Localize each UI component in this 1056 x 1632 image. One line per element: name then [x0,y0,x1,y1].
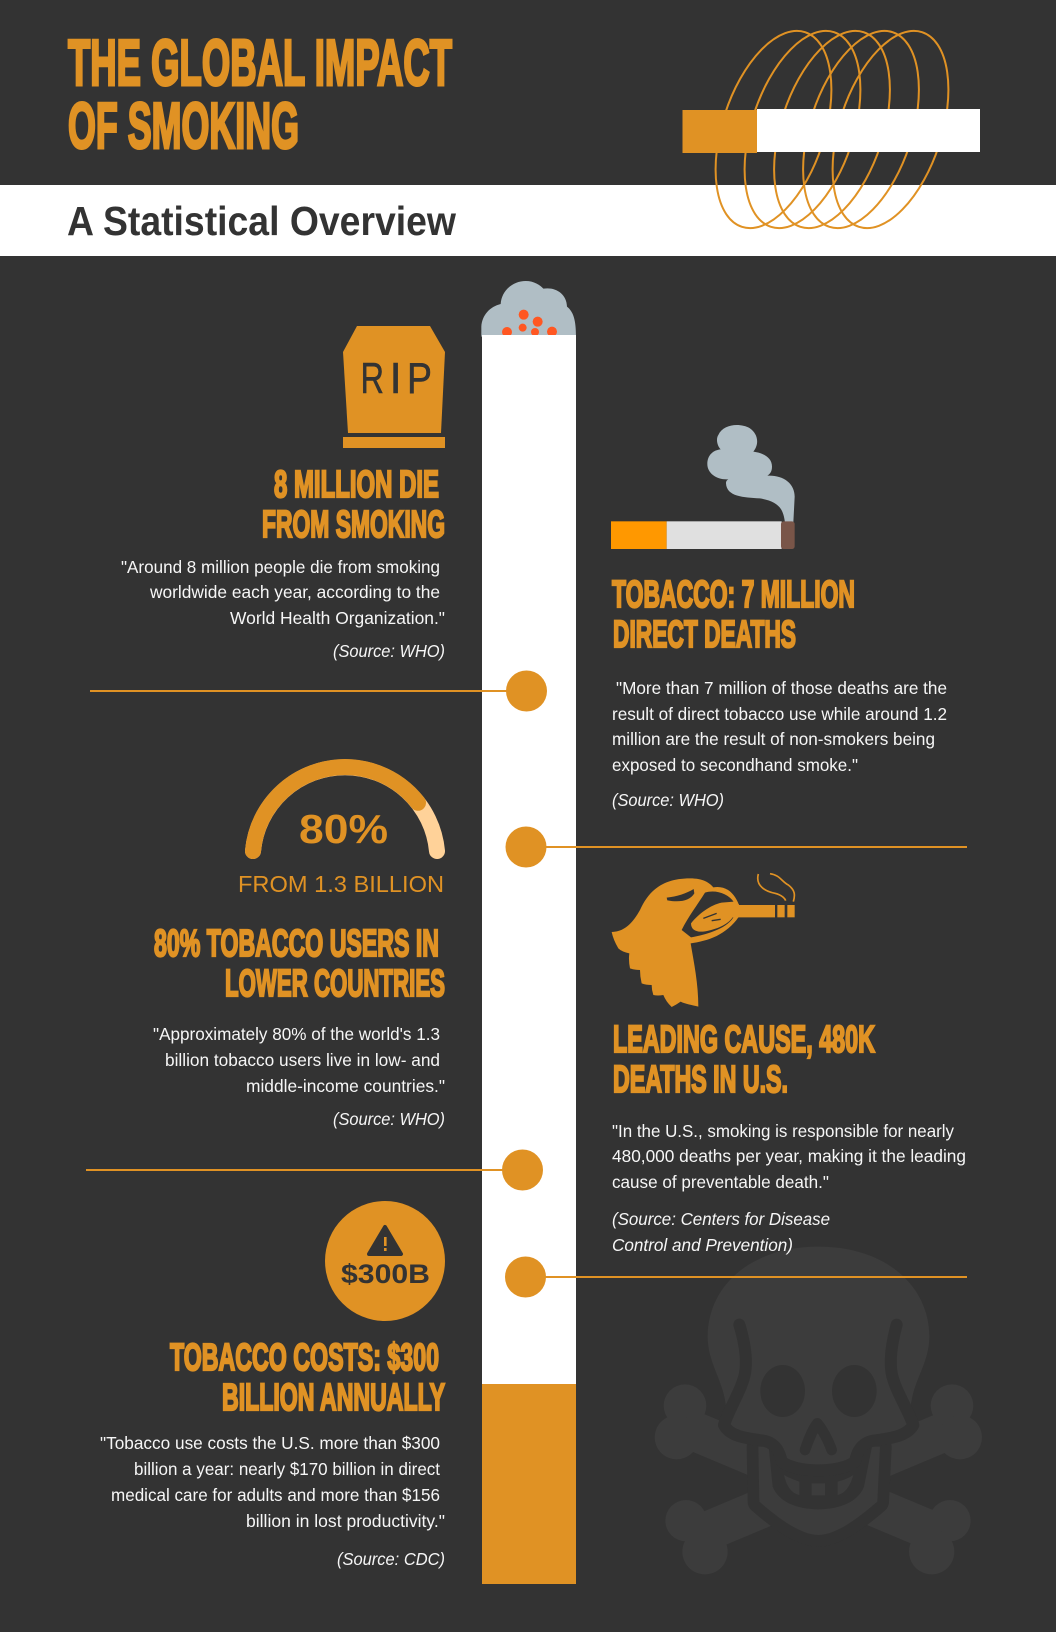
body text: cause of preventable death." [612,1172,829,1192]
heading: LEADING CAUSE, 480K [613,1019,875,1061]
source: Control and Prevention) [612,1235,793,1255]
icon: $300B warning badge [325,1201,445,1321]
body text: billion tobacco users live in low- and [165,1050,440,1070]
gauge: 80% from 1.3 billion: FROM 1.3 BILLION [238,871,444,897]
body text: worldwide each year, according to the [149,582,440,602]
body text: million are the result of non-smokers being [612,729,935,749]
connector: 80 percent tobacco users [86,1150,543,1190]
gauge: 80% from 1.3 billion [238,767,444,897]
heading: TOBACCO: 7 MILLION [612,574,855,616]
body text: medical care for adults and more than $156 [111,1485,440,1505]
title [68,26,452,162]
source: (Source: CDC) [337,1549,445,1569]
panel: leading cause in U.S. [612,874,966,1255]
body text: middle-income countries." [246,1076,445,1096]
subtitle: A Statistical Overview [67,198,456,244]
title: OF SMOKING [68,89,299,162]
main cigarette [481,281,576,1584]
heading: TOBACCO COSTS: $300 [170,1337,439,1379]
heading [154,923,445,1005]
heading [613,1019,875,1101]
body text: billion in lost productivity." [246,1511,445,1531]
body text [612,1121,966,1192]
panel: tobacco direct deaths [611,425,947,810]
heading: BILLION ANNUALLY [222,1377,445,1419]
icon: background skull and crossbones [655,1247,982,1574]
icon: eagle smoking [612,874,795,1007]
body text [121,557,445,628]
icon: lit cigarette [611,425,795,549]
source: (Source: WHO) [333,1109,445,1129]
body text [153,1024,445,1096]
body text: "More than 7 million of those deaths are the [616,678,947,698]
smoke cloud on cigarette tip [481,281,576,337]
body text: "Tobacco use costs the U.S. more than $300 [100,1433,440,1453]
heading [170,1337,445,1419]
subtitle band [0,185,1056,256]
heading: DEATHS IN U.S. [613,1059,788,1101]
heading [262,464,445,546]
icon: RIP tombstone [343,326,445,448]
icon: $300B warning badge: $300B [341,1259,430,1289]
body text: "Around 8 million people die from smoking [121,557,440,577]
body text: result of direct tobacco use while around 1.2 [612,704,947,724]
body text [100,1433,445,1531]
heading: 8 MILLION DIE [274,464,439,506]
icon: RIP tombstone: R [360,354,384,403]
heading [612,574,855,656]
heading: FROM SMOKING [262,504,445,546]
source: (Source: Centers for Disease [612,1209,830,1229]
heading: DIRECT DEATHS [613,614,796,656]
source: (Source: WHO) [333,641,445,661]
icon: RIP tombstone: P [407,354,432,403]
source: (Source: WHO) [612,790,724,810]
connector: tobacco direct deaths [506,826,967,868]
panel: 8 million die [121,326,445,661]
connector: 8 million die [90,670,547,712]
body text: billion a year: nearly $170 billion in direct [134,1459,440,1479]
source [612,1209,830,1255]
icon: RIP tombstone: I [390,354,402,403]
body text [612,678,947,775]
title: THE GLOBAL IMPACT [68,26,452,99]
connector: leading cause in U.S. [505,1256,967,1298]
gauge: 80% from 1.3 billion: 80% [299,806,388,852]
body text: "Approximately 80% of the world's 1.3 [153,1024,440,1044]
body text: World Health Organization." [230,608,445,628]
panel: 80 percent tobacco users [153,767,445,1129]
body text: exposed to secondhand smoke." [612,755,858,775]
heading: 80% TOBACCO USERS IN [154,923,439,965]
body text: "In the U.S., smoking is responsible for nearly [612,1121,954,1141]
panel: tobacco costs [100,1201,445,1569]
body text: 480,000 deaths per year, making it the leading [612,1146,966,1166]
heading: LOWER COUNTRIES [225,963,445,1005]
icon: header cigarette with smoke rings [682,16,980,243]
